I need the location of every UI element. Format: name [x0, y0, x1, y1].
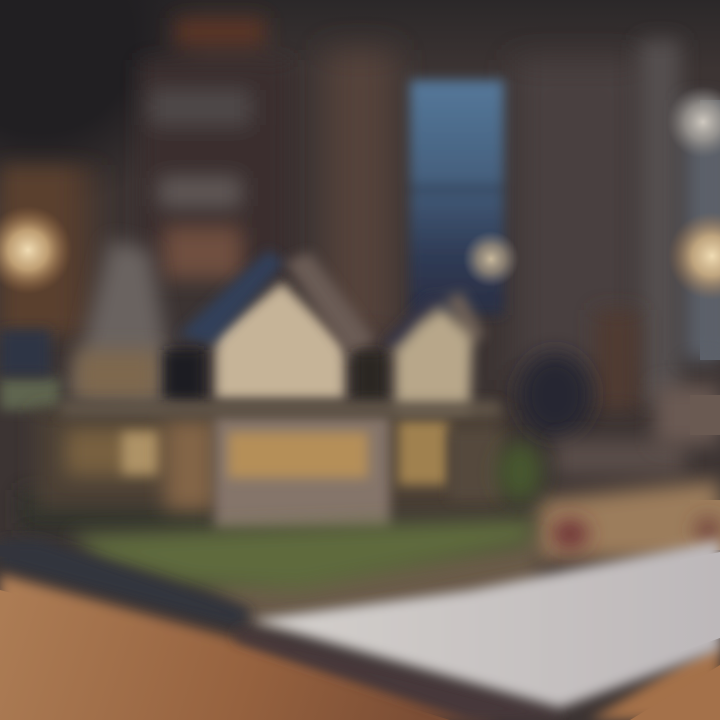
dark furniture on right — [519, 353, 720, 476]
blue roof — [178, 250, 285, 345]
shrub — [498, 442, 542, 502]
brown roof — [285, 252, 375, 358]
model house — [0, 240, 505, 530]
central gable — [215, 282, 345, 400]
distant table — [530, 480, 720, 560]
lower storey — [20, 410, 505, 530]
right window — [684, 100, 720, 360]
grass lawn — [70, 518, 535, 590]
blueprint paper — [250, 540, 720, 708]
area between lawn and paper — [200, 540, 540, 625]
dark paper shadow — [235, 628, 560, 720]
bookshelf — [140, 18, 290, 280]
dark table edge — [0, 540, 250, 628]
eave band — [60, 402, 500, 416]
dark chimneys — [164, 350, 386, 400]
lights — [0, 86, 720, 300]
wooden table — [0, 574, 720, 720]
right gable — [382, 292, 485, 410]
window — [410, 80, 504, 315]
left wing — [0, 240, 165, 410]
